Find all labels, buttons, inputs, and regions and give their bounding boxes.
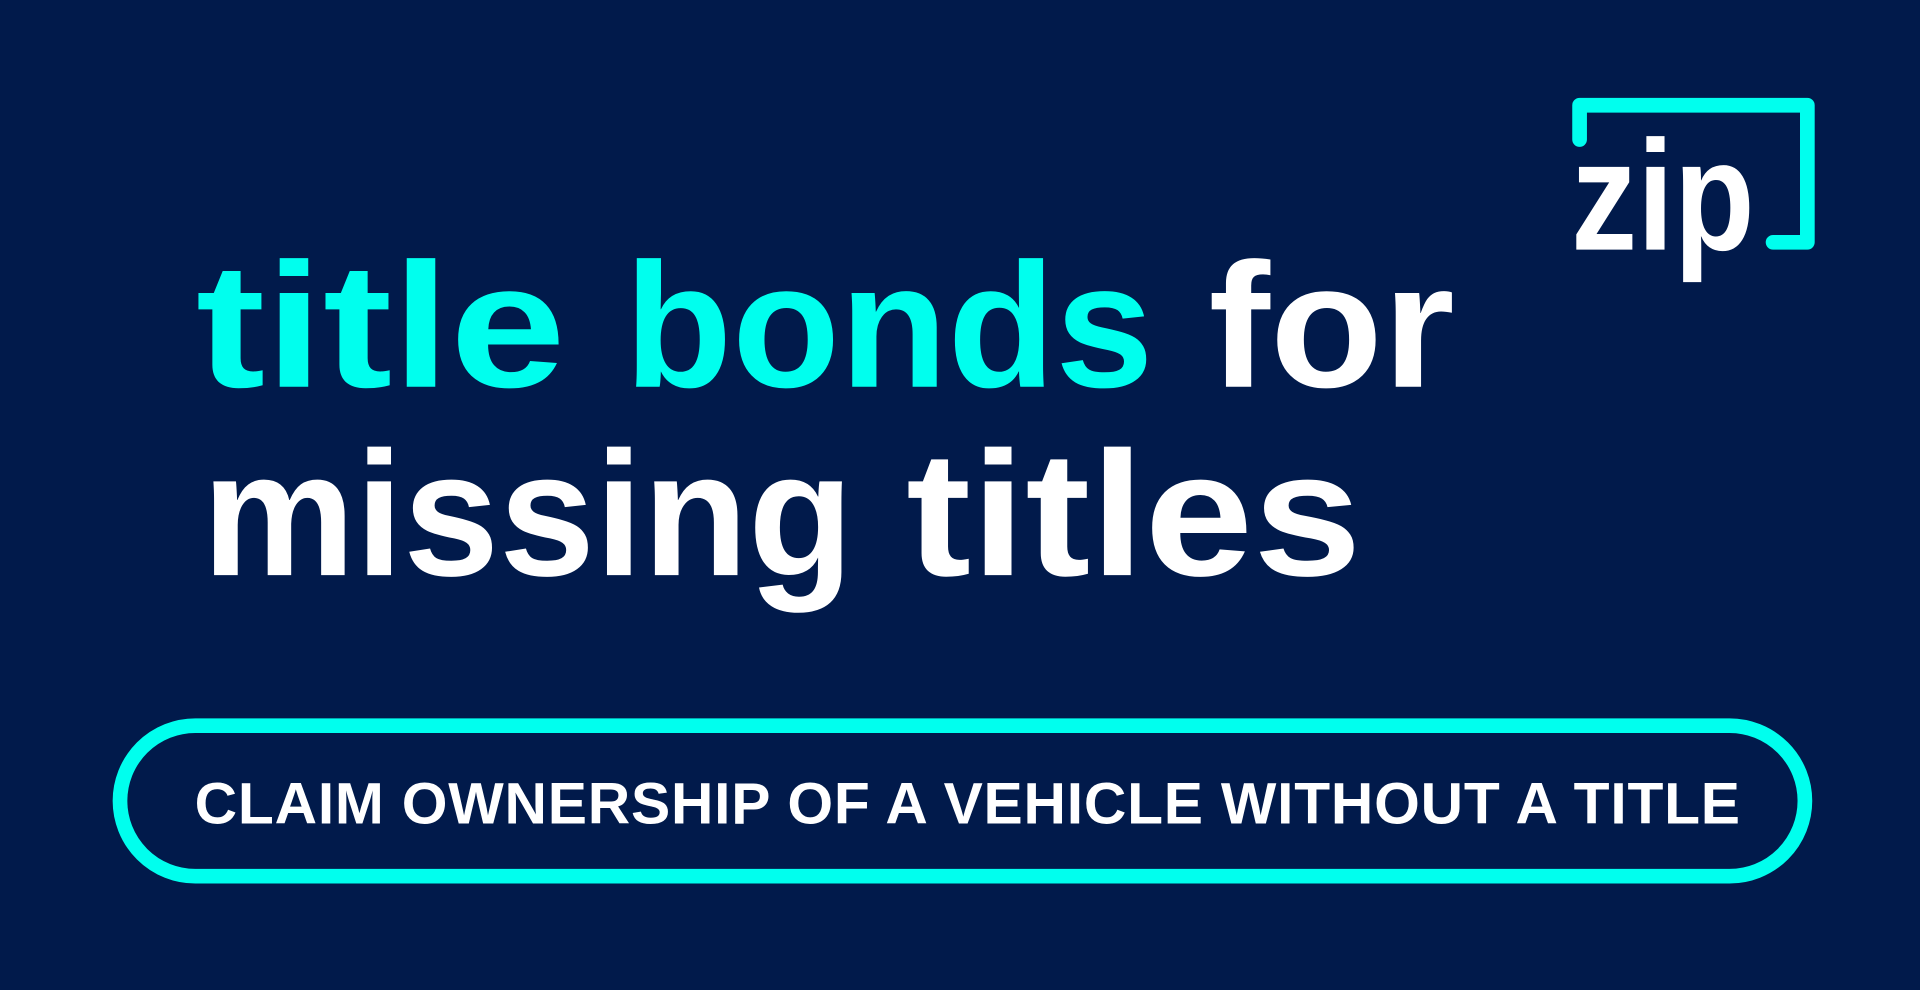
title: bonds — [624, 226, 1153, 425]
title: missing — [202, 414, 853, 613]
title: title — [196, 226, 566, 425]
title: titles — [906, 414, 1362, 613]
title — [196, 226, 1455, 613]
title: for — [1209, 226, 1455, 425]
callout: subtitle pill — [120, 726, 1805, 876]
logo: zip bracket mark: zip — [1571, 109, 1755, 284]
callout: subtitle pill: CLAIM OWNERSHIP OF A VEHICLE WITHOUT A TITLE — [195, 772, 1740, 837]
